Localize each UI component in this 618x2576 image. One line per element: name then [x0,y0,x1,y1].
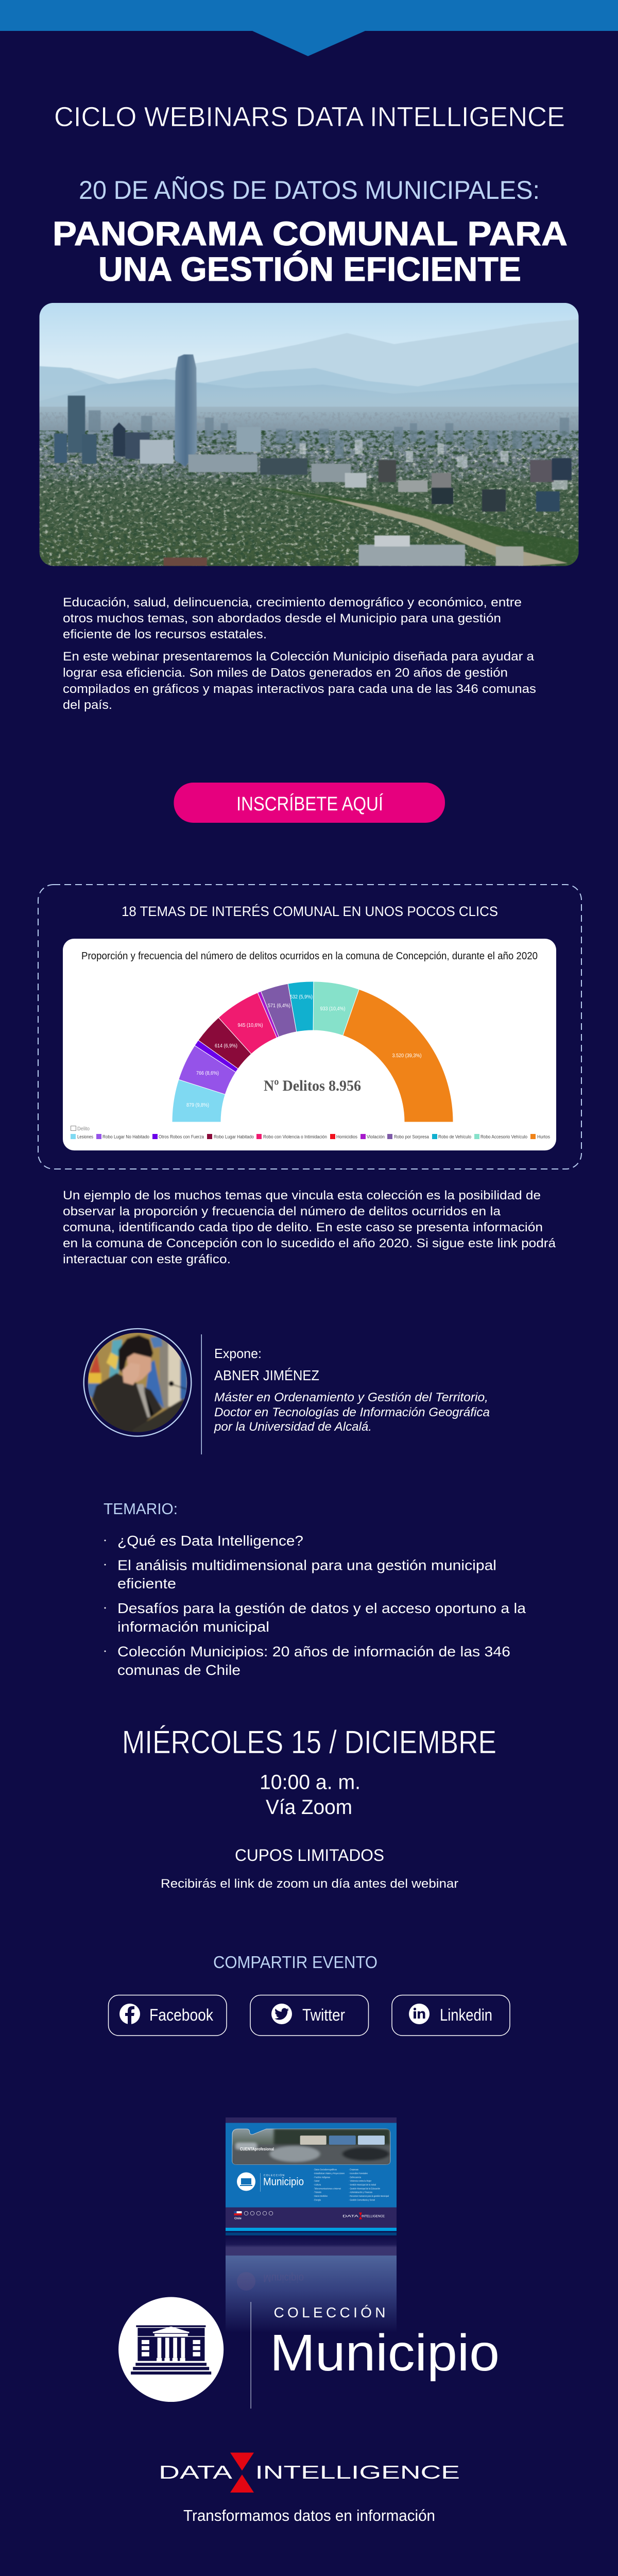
data intelligence logo [159,2452,460,2493]
share button: linkedin: Linkedin [440,2006,492,2024]
mini topic lists [313,2168,389,2201]
speaker details: ABNER JIMÉNEZ [214,1367,319,1383]
slice labels: 879 (9,8%) [186,1102,209,1108]
intro text: otros muchos temas, son abordados desde el Municipio para una gestión [63,612,501,625]
collection screenshot with reflection: Municipio [263,2272,304,2284]
chart description text: observar la proporción y frecuencia del número de delitos ocurridos en la [63,1205,501,1218]
intro text: En este webinar presentaremos la Colección Municipio diseñada para ayudar a [63,650,535,664]
panel: dashed chart frame [38,885,581,1169]
legend: Delito [77,1126,90,1132]
distant city blocks [55,354,578,566]
temario heading: TEMARIO: [104,1500,178,1518]
slice labels: 933 (10,4%) [320,1006,345,1012]
chart card [63,939,556,1150]
limited seats notice [161,1846,458,1891]
intro text: eficiente de los recursos estatales. [63,628,267,641]
event time and place: 10:00 a. m. [260,1771,360,1794]
share button: twitter: Twitter [302,2006,345,2024]
towers [175,354,197,467]
legend [71,1126,550,1140]
chart title: Proporción y frecuencia del número de delitos ocurridos en la comuna de Concepción, durante el año 2020 [81,951,538,962]
screenshot footer [226,2207,397,2228]
mini topic lists: · Estadísticas Vitales y Proyecciones [313,2172,345,2175]
slice labels: 614 (6,9%) [215,1043,237,1049]
limited seats notice: CUPOS LIMITADOS [235,1846,384,1865]
divider [201,1334,202,1454]
slice labels: 945 (10,6%) [238,1022,263,1028]
mini topic lists: · Gestión Comunitaria y Social [349,2198,375,2201]
button: inscríbete aquí [174,783,445,823]
mini topic lists: · Empresas [349,2168,359,2171]
share button: facebook: Facebook [149,2006,214,2024]
data intelligence logo: INTELLIGENCE [255,2462,460,2483]
slice labels: 571 (6,4%) [268,1003,290,1009]
share button: linkedin [392,1995,510,2036]
semicircle chart [172,981,453,1122]
tagline: Transformamos datos en información [183,2506,435,2524]
collection screenshot with reflection: INTELLIGENCE [362,2215,385,2218]
series title: CICLO WEBINARS DATA INTELLIGENCE [54,101,565,132]
collection screenshot with reflection: CUENTAprofesional [240,2147,274,2151]
top banner with chevron [0,0,618,56]
temario list: comunas de Chile [117,1662,241,1678]
mini topic lists: · Cultura [313,2183,321,2186]
limited seats notice: Recibirás el link de zoom un día antes del webinar [161,1877,458,1891]
panel heading: 18 TEMAS DE INTERÉS COMUNAL EN UNOS POCOS CLICS [122,904,498,919]
mini topic lists: · Administración y Finanzas [349,2191,373,2194]
photo: Santiago skyline [40,303,578,566]
legend: Homicidios [336,1134,357,1140]
screenshot banner photo [232,2129,390,2165]
mini topic lists: · Gestión Municipal de la Salud [349,2183,376,2186]
mini topic lists: · Datos Sociodemográficos [313,2168,337,2171]
mini topic lists: · Energía [313,2198,321,2201]
chart description text: Un ejemplo de los muchos temas que vincula esta colección es la posibilidad de [63,1189,541,1202]
collection screenshot with reflection: Municipio [263,2176,304,2188]
mini topic lists: · Pueblos Indígenas [313,2176,331,2178]
intro text: Educación, salud, delincuencia, crecimiento demográfico y económico, entre [63,596,522,609]
legend: Violación [367,1134,385,1140]
share button: twitter [250,1995,369,2036]
main title [53,214,568,288]
main title: UNA GESTIÓN EFICIENTE [98,250,521,288]
chart description text: interactuar con este gráfico. [63,1252,231,1266]
icon: municipal building [118,2297,224,2402]
share button: facebook [108,1995,227,2036]
button: inscríbete aquí: INSCRÍBETE AQUÍ [236,793,383,815]
data intelligence logo: DATA [159,2462,232,2483]
intro text: compilados en gráficos y mapas interactivos para cada una de las 346 comunas [63,682,536,696]
collection screenshot with reflection: COLECCIÓN [264,2174,284,2177]
event time and place [260,1771,360,1819]
speaker details: Máster en Ordenamiento y Gestión del Territorio, [214,1391,488,1404]
speaker portrait [84,1329,191,1436]
speaker details: Doctor en Tecnologías de Información Geográfica [214,1405,490,1419]
mini topic lists: · Gestión Municipal de la Educación [349,2187,380,2190]
temario list: información municipal [117,1619,269,1635]
temario list: Colección Municipios: 20 años de información de las 346 [117,1643,510,1659]
legend: Robo con Violencia o Intimidación [263,1134,327,1140]
collection screenshot with reflection: DATA [342,2215,358,2218]
legend: Robo Lugar No Habitado [102,1134,149,1140]
collection logo [118,2297,500,2409]
speaker details [214,1346,490,1434]
chart description text [63,1189,556,1266]
river and road [252,486,578,566]
legend: Hurtos [537,1134,550,1140]
chart total: Nº Delitos 8.956 [264,1077,361,1094]
legend: Robo Accesorio Vehículo [480,1134,527,1140]
mini topic lists: · Tránsito [313,2191,321,2194]
speaker details: por la Universidad de Alcalá. [214,1420,372,1434]
mini topic lists: · Violencia contra la Mujer [349,2180,371,2182]
collection screenshot with reflection: Chile [234,2217,242,2221]
temario list: El análisis multidimensional para una gestión municipal [117,1557,496,1573]
event date: MIÉRCOLES 15 / DICIEMBRE [122,1724,496,1760]
temario list: ¿Qué es Data Intelligence? [117,1533,303,1549]
slice labels: 766 (8,6%) [196,1070,219,1076]
mini topic lists: · Incendios Forestales [349,2172,368,2175]
mini topic lists: · Salud [313,2180,319,2182]
mini topic lists: · Datos Morbilos [313,2195,328,2197]
chart description text: en la comuna de Concepción con lo sucedido el año 2020. Si sigue este link podrá [63,1236,556,1250]
legend: Robo por Sorpresa [394,1134,430,1140]
speaker details: Expone: [214,1346,262,1361]
event time and place: Vía Zoom [266,1796,352,1819]
intro text: del país. [63,698,112,712]
collection logo: Municipio [270,2324,500,2382]
temario list: Desafíos para la gestión de datos y el acceso oportuno a la [117,1600,526,1616]
collection screenshot with reflection [226,2117,397,2333]
mini topic lists: · Recursos Humanos para la gestión Municipal [349,2195,389,2197]
mini topic lists: · Delincuencia [349,2176,361,2178]
legend: Robo Lugar Habitado [214,1134,254,1140]
temario list: eficiente [117,1575,176,1591]
logo divider [250,2302,251,2409]
reflection [226,2232,397,2235]
share heading: COMPARTIR EVENTO [213,1953,377,1972]
slice labels: 3.520 (39,3%) [392,1053,421,1059]
temario list [104,1533,526,1678]
legend: Otros Robos con Fuerza [159,1134,204,1140]
slice labels [186,994,421,1108]
logo wordmark: COLECCIÓN [274,2304,385,2320]
main title: PANORAMA COMUNAL PARA [53,214,568,252]
intro text: lograr esa eficiencia. Son miles de Datos generados en 20 años de gestión [63,666,508,680]
mini logo [237,2172,255,2191]
intro text [63,596,536,712]
legend: Robo de Vehículo [438,1134,471,1140]
subtitle: 20 DE AÑOS DE DATOS MUNICIPALES: [79,176,540,205]
mini topic lists: · Telecomunicaciones e Internet [313,2187,341,2190]
slice labels: 532 (5,9%) [290,994,313,1000]
legend: Lesiones [77,1134,93,1140]
chart description text: comuna, identificando cada tipo de delito. En este caso se presenta información [63,1221,543,1234]
